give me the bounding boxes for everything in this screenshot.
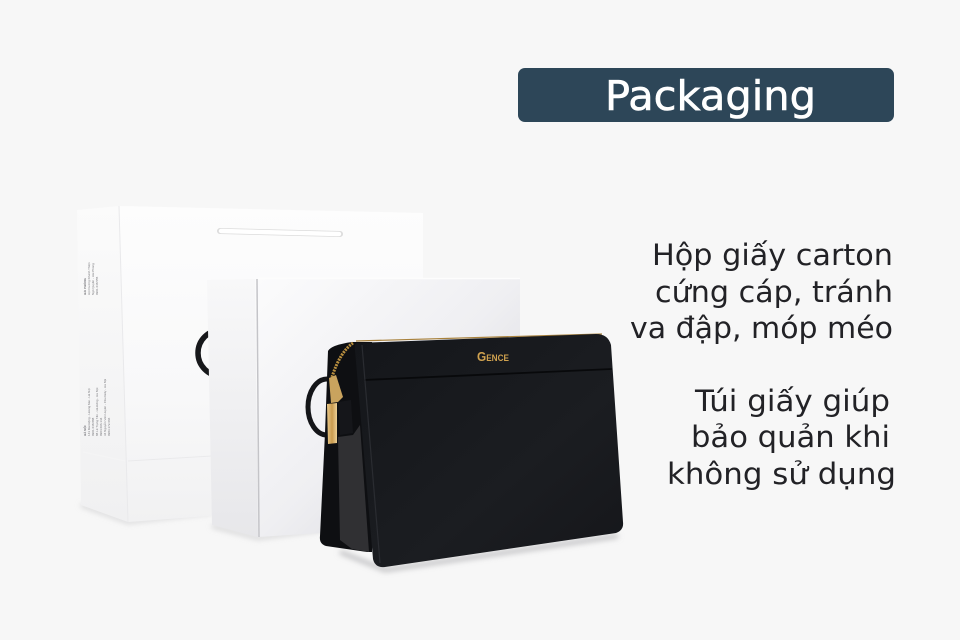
clutch side gusset [338, 425, 369, 552]
bag logo ring [198, 330, 244, 376]
bag side address text: 143 Mai Động - Hoàng Mai - Hà Nội [87, 388, 91, 436]
text block: carton box description: Hộp giấy carton [652, 238, 893, 272]
clutch front panel [355, 334, 623, 567]
bag side address text [82, 262, 111, 436]
bag side address text: 88 Lê Trọng Tấn - Hà Đông - Hà Nội [95, 387, 99, 436]
bag side address text: HÀ NỘI [82, 425, 87, 436]
bag side address text: 0904.696.144 [99, 417, 103, 436]
text block: carton box description: va đập, móp méo [630, 311, 893, 345]
bag side panel [77, 206, 128, 522]
illustration: white carton box [207, 278, 520, 538]
bag side address text: 34 Nguyễn Văn Huyên - Cầu Giấy - Hà Nội [102, 378, 107, 436]
text block: paper bag description: Túi giấy giúp [694, 384, 890, 418]
bag rope handle [220, 231, 340, 234]
heading: Packaging [518, 68, 894, 122]
illustration: black Gence clutch bag [308, 334, 623, 570]
bag side address text: HẢI PHÒNG [82, 277, 87, 295]
text block: paper bag description: bảo quản khi [691, 420, 890, 454]
illustration: white paper bag [77, 206, 423, 522]
bag side address text: 0901.648.555 [95, 276, 99, 295]
bag front panel [119, 206, 423, 522]
text block: paper bag description [667, 384, 896, 491]
clutch back panel [320, 342, 372, 552]
text block: carton box description [630, 238, 893, 345]
zipper pull [327, 375, 343, 444]
bag side address text: 0901.648.888 [91, 417, 95, 436]
zipper tape [332, 343, 353, 377]
edge piping [362, 345, 380, 563]
heading: Packaging: Packaging [605, 72, 816, 120]
zipper flap [338, 400, 353, 435]
bag side address text: 0983.172.666 [107, 417, 111, 436]
text block: carton box description: cứng cáp, tránh [655, 275, 893, 309]
bag side address text: Ngô Quyền - Hải Phòng [91, 263, 95, 295]
box front face [258, 279, 520, 537]
box side flap [207, 279, 258, 537]
text block: paper bag description: không sử dụng [667, 457, 896, 491]
ring pull [308, 379, 346, 435]
pocket seam [364, 369, 612, 380]
bag side address text: Hội Cường Khánh Thiện [87, 262, 91, 295]
Gence logo: GENCE [477, 349, 509, 364]
